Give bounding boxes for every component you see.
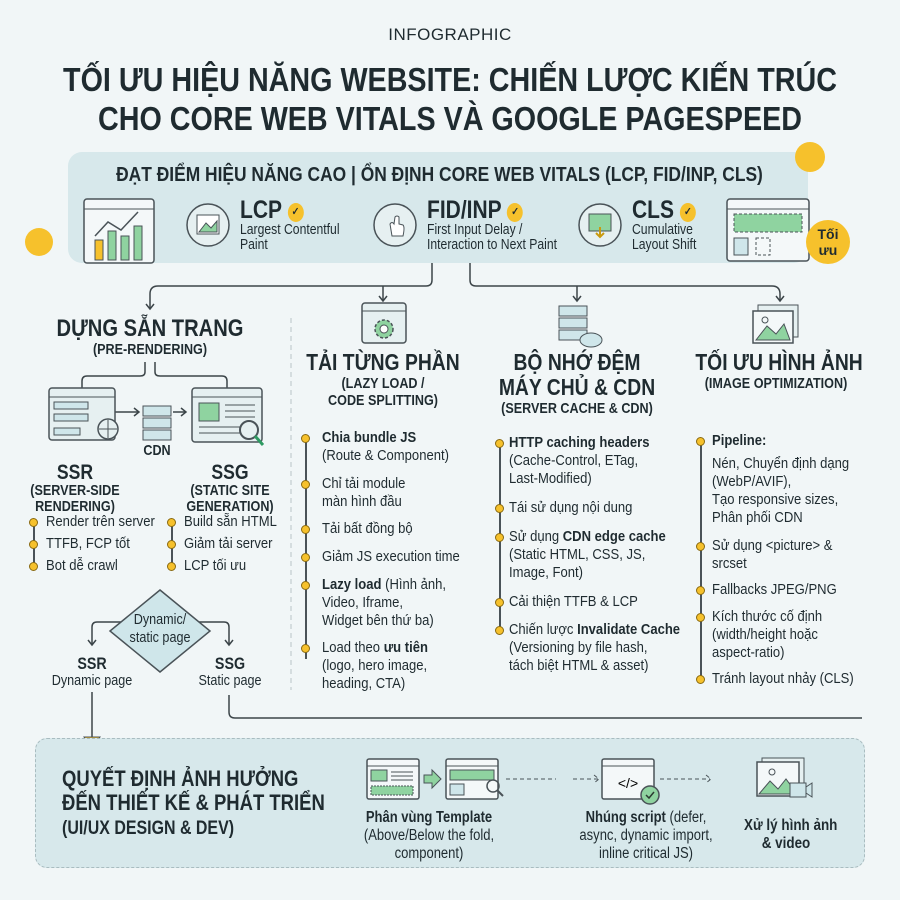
list: HTTP caching headers bbox=[509, 435, 649, 451]
list: Widget bên thứ ba) bbox=[322, 613, 434, 629]
icon: image stack bbox=[752, 304, 798, 344]
title bbox=[63, 61, 837, 137]
heading: ĐẾN THIẾT KẾ & PHÁT TRIỂN bbox=[62, 790, 325, 815]
metric: LCP: Largest Contentful bbox=[240, 222, 340, 238]
metric: FID/INP: Interaction to Next Paint bbox=[427, 237, 557, 253]
title: CHO CORE WEB VITALS VÀ GOOGLE PAGESPEED bbox=[98, 100, 802, 137]
step: script bbox=[573, 758, 713, 862]
icon: server cloud bbox=[558, 306, 602, 348]
list: Chia bundle JS bbox=[322, 430, 416, 446]
step: script: inline critical JS) bbox=[599, 845, 693, 862]
list: Sử dụng CDN edge cache bbox=[509, 529, 666, 545]
list: Tránh layout nhảy (CLS) bbox=[712, 671, 854, 687]
panel: lazy load bbox=[301, 302, 460, 692]
icon: SSG window bbox=[191, 387, 264, 446]
metric: CLS: Cumulative bbox=[632, 222, 693, 238]
metric: LCP: Paint bbox=[240, 237, 268, 253]
step: media bbox=[744, 758, 837, 852]
title: TỐI ƯU HIỆU NĂNG WEBSITE: CHIẾN LƯỢC KIẾN TRÚC bbox=[63, 61, 837, 98]
SSG label: (STATIC SITE bbox=[190, 482, 270, 499]
step: script: </> bbox=[618, 775, 638, 791]
list bbox=[495, 435, 680, 674]
list: SSR: Bot dễ crawl bbox=[46, 558, 118, 574]
list: Video, Iframe, bbox=[322, 595, 403, 611]
heading: (LAZY LOAD / bbox=[341, 375, 425, 392]
SSR label bbox=[30, 461, 120, 515]
list: (width/height hoặc bbox=[712, 627, 818, 643]
metric: FID/INP: FID/INP bbox=[427, 196, 501, 224]
step: script: Nhúng script (defer, bbox=[586, 809, 706, 826]
list: Load theo ưu tiên bbox=[322, 640, 428, 656]
list: (WebP/AVIF), bbox=[712, 474, 791, 490]
list: Tạo responsive sizes, bbox=[712, 492, 838, 508]
list: (Versioning by file hash, bbox=[509, 640, 648, 656]
list: SSG: LCP tối ưu bbox=[184, 558, 246, 574]
list: tách biệt HTML & asset) bbox=[509, 658, 648, 674]
heading: DỰNG SẴN TRANG bbox=[57, 315, 243, 342]
step: template bbox=[364, 758, 556, 862]
heading: TỐI ƯU HÌNH ẢNH bbox=[695, 349, 863, 375]
step: media: Xử lý hình ảnh bbox=[744, 817, 837, 834]
decision diamond bbox=[108, 589, 212, 673]
icon: CDN server: CDN bbox=[143, 442, 171, 459]
heading: (UI/UX DESIGN & DEV) bbox=[62, 818, 234, 839]
SSG label: SSG bbox=[211, 461, 249, 484]
list bbox=[301, 430, 460, 692]
list: SSR: TTFB, FCP tốt bbox=[46, 536, 130, 552]
metric: LCP: LCP bbox=[240, 196, 282, 224]
list: Image, Font) bbox=[509, 565, 583, 581]
list: (Static HTML, CSS, JS, bbox=[509, 547, 645, 563]
list: Giảm JS execution time bbox=[322, 549, 460, 565]
icon: chart window bbox=[83, 198, 155, 264]
SSG static: SSG bbox=[215, 654, 245, 673]
list: Lazy load (Hình ảnh, bbox=[322, 577, 446, 593]
list: SSG: Build sẵn HTML bbox=[184, 514, 277, 530]
list: (Route & Component) bbox=[322, 448, 449, 464]
label: infographic: INFOGRAPHIC bbox=[388, 25, 512, 44]
list: (Cache-Control, ETag, bbox=[509, 453, 638, 469]
list: Nén, Chuyển định dạng bbox=[712, 456, 849, 472]
heading bbox=[695, 349, 863, 392]
icon: CDN server bbox=[142, 406, 172, 459]
list: SSG bbox=[167, 513, 277, 574]
list: Cải thiện TTFB & LCP bbox=[509, 594, 638, 610]
list: SSR bbox=[29, 514, 155, 574]
panel: server cache & CDN bbox=[495, 306, 680, 674]
SSG static: Static page bbox=[198, 672, 262, 689]
heading: (IMAGE OPTIMIZATION) bbox=[705, 375, 847, 392]
list: Kích thước cố định bbox=[712, 609, 822, 625]
list: Tải bất đồng bộ bbox=[322, 521, 413, 537]
heading: (PRE-RENDERING) bbox=[93, 341, 207, 358]
SSR label: RENDERING) bbox=[35, 498, 115, 515]
metric: CLS: ✓ bbox=[684, 206, 692, 218]
list: aspect-ratio) bbox=[712, 645, 785, 661]
icon: layout window with "Tối ưu" badge bbox=[726, 198, 850, 264]
icon: layout window with "Tối ưu" badge: Tối bbox=[818, 226, 838, 242]
decision diamond: Dynamic/ bbox=[134, 611, 186, 628]
heading bbox=[499, 349, 655, 417]
icon: yellow decor circles bbox=[795, 142, 825, 172]
icon: gear window bbox=[361, 302, 407, 344]
metric: CLS: CLS bbox=[632, 196, 674, 224]
panel: design & dev decisions bbox=[35, 738, 865, 868]
SSG label: GENERATION) bbox=[186, 498, 274, 515]
list: Last-Modified) bbox=[509, 471, 592, 487]
heading: TẢI TỪNG PHẦN bbox=[306, 349, 460, 375]
list: Tái sử dụng nội dung bbox=[509, 500, 632, 516]
band heading: ĐẠT ĐIỂM HIỆU NĂNG CAO | ỔN ĐỊNH CORE WEB VITALS (LCP, FID/INP, CLS) bbox=[116, 164, 763, 186]
SSR dynamic bbox=[52, 654, 132, 689]
heading: (SERVER CACHE & CDN) bbox=[501, 400, 653, 417]
icon: layout window with "Tối ưu" badge: ưu bbox=[819, 242, 837, 258]
metric: LCP bbox=[186, 196, 340, 253]
heading: BỘ NHỚ ĐỆM bbox=[513, 349, 641, 375]
heading: QUYẾT ĐỊNH ẢNH HƯỞNG bbox=[62, 766, 298, 791]
step: template: component) bbox=[395, 845, 463, 862]
list: srcset bbox=[712, 556, 747, 572]
panel: image optimization bbox=[695, 304, 863, 687]
list: heading, CTA) bbox=[322, 676, 405, 692]
list: Phân phối CDN bbox=[712, 510, 803, 526]
list: SSR: Render trên server bbox=[46, 514, 155, 530]
heading: CODE SPLITTING) bbox=[328, 392, 438, 409]
heading bbox=[62, 766, 325, 839]
step: template: Phân vùng Template bbox=[366, 809, 492, 826]
list: Chỉ tải module bbox=[322, 476, 405, 492]
step: script: async, dynamic import, bbox=[579, 827, 713, 844]
SSR dynamic: SSR bbox=[77, 654, 107, 673]
panel: core web vitals band bbox=[68, 152, 808, 263]
SSG label bbox=[186, 461, 274, 515]
list: Sử dụng <picture> & bbox=[712, 538, 832, 554]
list bbox=[696, 433, 854, 687]
metric: FID/INP: First Input Delay / bbox=[427, 222, 522, 238]
panel: pre-rendering bbox=[29, 314, 277, 689]
step: media: & video bbox=[762, 835, 810, 852]
metric: CLS bbox=[578, 196, 696, 253]
list: Chiến lược Invalidate Cache bbox=[509, 622, 680, 638]
metric: FID/INP: ✓ bbox=[511, 206, 519, 218]
list: Pipeline: bbox=[712, 433, 766, 449]
metric: LCP: ✓ bbox=[292, 206, 299, 218]
heading bbox=[57, 314, 243, 358]
SSR label: SSR bbox=[57, 461, 93, 484]
SSG static bbox=[198, 654, 262, 689]
metric: FID/INP bbox=[373, 196, 557, 253]
list: SSG: Giảm tải server bbox=[184, 536, 272, 552]
step: template: (Above/Below the fold, bbox=[364, 827, 494, 844]
SSR label: (SERVER-SIDE bbox=[30, 482, 120, 499]
SSR dynamic: Dynamic page bbox=[52, 672, 132, 689]
list: (logo, hero image, bbox=[322, 658, 427, 674]
list: Fallbacks JPEG/PNG bbox=[712, 582, 837, 598]
icon: SSR window bbox=[48, 387, 119, 441]
heading: MÁY CHỦ & CDN bbox=[499, 374, 655, 400]
metric: CLS: Layout Shift bbox=[632, 237, 696, 253]
list: màn hình đầu bbox=[322, 494, 402, 510]
heading bbox=[306, 349, 460, 409]
decision diamond: static page bbox=[130, 629, 190, 646]
